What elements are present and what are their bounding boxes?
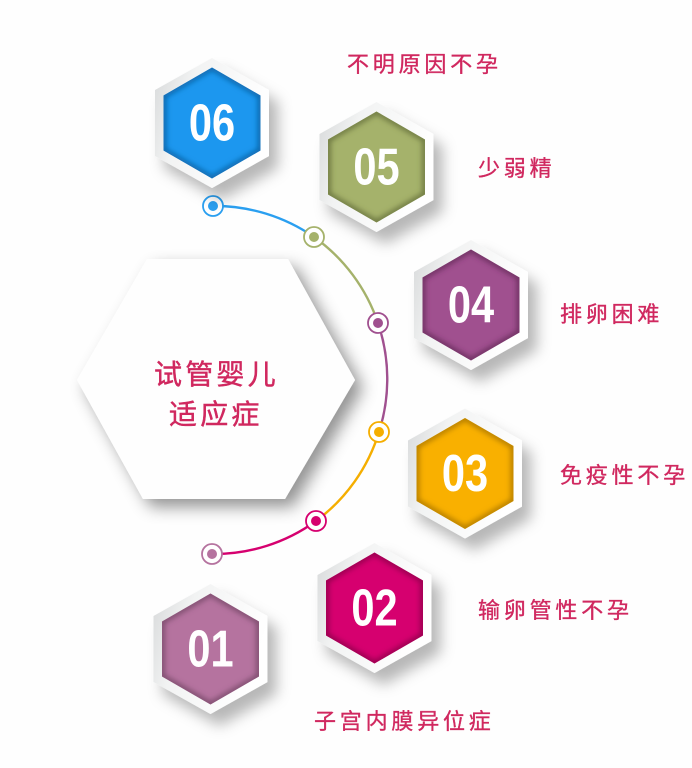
node 05 [304,227,324,247]
badge 05 [320,102,434,232]
center hexagon [77,259,355,499]
badge 05: 05 [353,137,400,196]
badge 06 [155,58,269,188]
label 03: 免疫性不孕 [560,463,689,488]
label 02: 输卵管性不孕 [478,598,633,623]
badge 04 [414,240,528,370]
badge 04: 04 [448,275,494,334]
node 03 [369,422,389,442]
badge 02: 02 [351,578,398,637]
timeline arc [212,206,387,554]
center title: 适应症 [169,399,263,430]
node 01 [202,544,222,564]
badge 01: 01 [187,619,234,678]
label 05: 少弱精 [478,156,555,181]
label 06: 不明原因不孕 [347,52,502,77]
node 04 [368,313,388,333]
badge 02 [318,543,432,673]
badge 01 [154,584,268,714]
node 02 [306,511,326,531]
badge 03 [408,408,522,538]
label 04: 排卵困难 [560,302,663,327]
center title: 试管婴儿 [154,359,279,390]
badge 03: 03 [442,444,488,502]
node 06 [203,196,223,216]
label 01: 子宫内膜异位症 [314,709,495,734]
badge 06: 06 [189,93,235,152]
